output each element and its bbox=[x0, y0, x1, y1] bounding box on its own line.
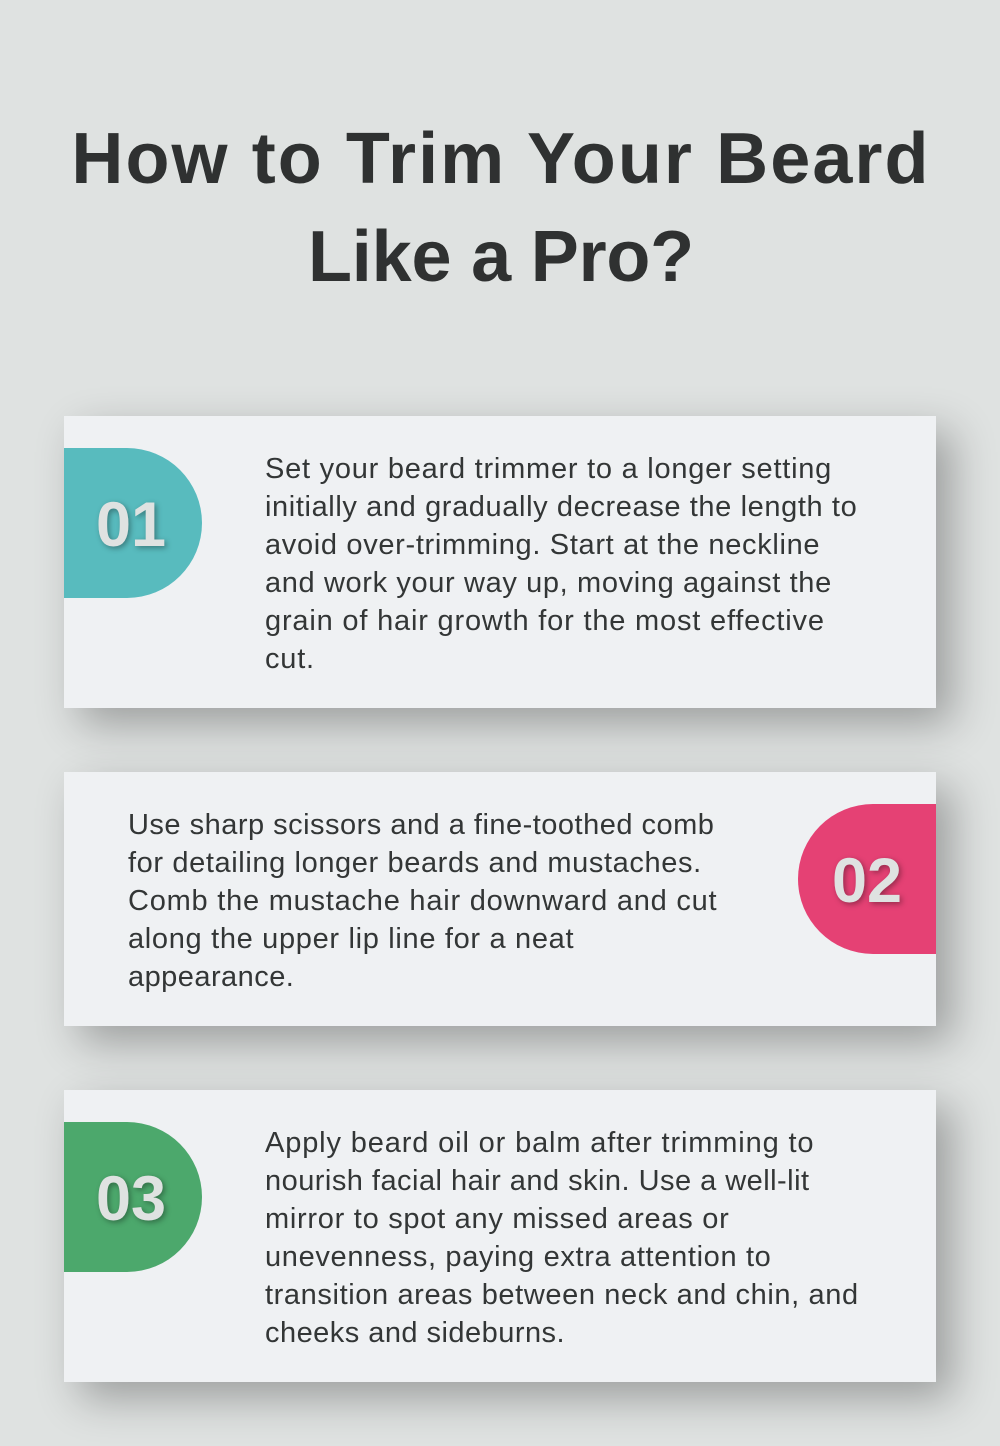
text: step 01: and work your way up, moving against the bbox=[265, 567, 832, 599]
text: step 01: Set your beard trimmer to a longer setting bbox=[265, 453, 832, 485]
text: step 01 bbox=[265, 453, 857, 675]
text: step 01: initially and gradually decrease the length to bbox=[265, 491, 857, 523]
panel: step 03 bbox=[64, 1090, 936, 1382]
text: step 02 bbox=[128, 809, 717, 993]
badge: 02 bbox=[798, 804, 936, 954]
text: step 02: appearance. bbox=[128, 961, 294, 993]
panel: step 01 bbox=[64, 416, 936, 708]
text: step 03 bbox=[265, 1127, 859, 1349]
text: step 01: grain of hair growth for the most effective bbox=[265, 605, 825, 637]
text: step 03: transition areas between neck and chin, and bbox=[265, 1279, 859, 1311]
text: step 03: cheeks and sideburns. bbox=[265, 1317, 565, 1349]
text: step 03: Apply beard oil or balm after trimming to bbox=[265, 1127, 814, 1159]
text: step 01: cut. bbox=[265, 643, 315, 675]
title bbox=[71, 119, 931, 297]
text: step 03: unevenness, paying extra attention to bbox=[265, 1241, 771, 1273]
title: How to Trim Your Beard bbox=[71, 119, 931, 199]
text: step 02: Comb the mustache hair downward and cut bbox=[128, 885, 717, 917]
badge: 01 bbox=[64, 448, 202, 598]
text: step 02: for detailing longer beards and mustaches. bbox=[128, 847, 702, 879]
text: step 03: nourish facial hair and skin. Use a well-lit bbox=[265, 1165, 810, 1197]
title: Like a Pro? bbox=[308, 217, 694, 297]
text: step 02: along the upper lip line for a neat bbox=[128, 923, 574, 955]
text: step 01: avoid over-trimming. Start at the neckline bbox=[265, 529, 820, 561]
text: step 03: mirror to spot any missed areas or bbox=[265, 1203, 729, 1235]
panel: step 02 bbox=[64, 772, 936, 1026]
badge: 01: 01 bbox=[96, 490, 166, 560]
badge: 03 bbox=[64, 1122, 202, 1272]
badge: 02: 02 bbox=[832, 846, 902, 916]
text: step 02: Use sharp scissors and a fine-toothed comb bbox=[128, 809, 714, 841]
badge: 03: 03 bbox=[96, 1164, 166, 1234]
